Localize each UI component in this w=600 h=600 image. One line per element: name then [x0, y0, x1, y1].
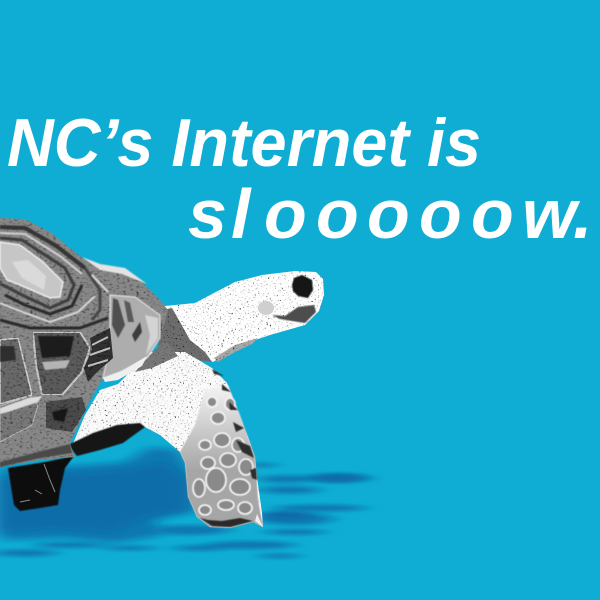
leg spines [212, 369, 257, 480]
title line 1: NC’s Internet is [7, 105, 481, 181]
neck fold shading [135, 340, 178, 372]
shell highlights [82, 257, 147, 284]
scute: left [0, 338, 32, 404]
scute: upper left [0, 242, 63, 298]
leg scales [180, 385, 263, 528]
eye [292, 275, 313, 298]
rear leg [8, 456, 74, 511]
scute: lower left [0, 396, 38, 442]
scute: lower dark [46, 397, 86, 432]
underside shadow [68, 423, 145, 456]
neck and head [158, 271, 324, 362]
scute: right [103, 295, 160, 378]
title [7, 105, 592, 253]
ground shadow [0, 447, 370, 558]
title line 2: slooooow. [188, 175, 592, 253]
shell [0, 218, 168, 467]
rings on mid shell [0, 318, 108, 328]
tortoise [0, 218, 324, 528]
scute: dark right [84, 328, 113, 382]
scute: middle dark [33, 332, 90, 395]
front leg [72, 340, 263, 528]
rings around top scute [0, 227, 85, 268]
